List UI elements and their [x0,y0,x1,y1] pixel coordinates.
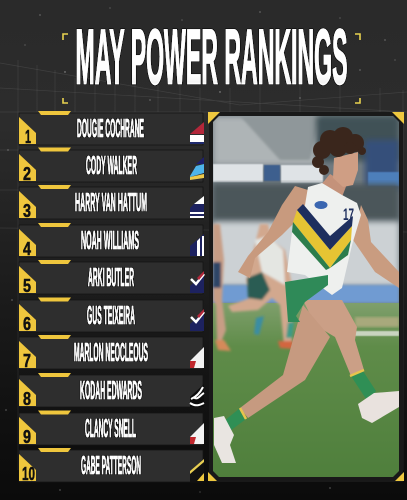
row 4 [19,223,204,259]
title corner brackets [63,34,360,103]
player: sponsor logo [314,201,328,209]
row 3 [19,185,204,221]
player: right boot [358,391,399,423]
photo corner accents [208,112,404,481]
row 9 [19,410,204,447]
row 8: KODAH EDWARDS [80,377,142,405]
player: shorts [285,275,328,322]
main player [214,127,399,463]
player: jersey chevron [292,204,353,270]
panel: rankings list [19,111,204,484]
row 10: GABE PATTERSON [81,452,141,480]
text: MARLON NEOCLEOUS [74,339,148,367]
row 9: 9 [23,427,31,447]
row 7: 7 [23,351,31,371]
player: face [333,152,358,187]
player: left sock [226,409,246,430]
row 2 [19,148,204,184]
player: left leg [240,305,330,418]
player: right arm [353,205,399,288]
row 5: ARKI BUTLER [88,264,134,292]
player: left boot [214,416,236,463]
text: DOUGIE COCHRANE [77,115,144,143]
row 9: CLANCY SNELL [85,415,136,443]
text: HARRY VAN HATTUM [75,189,147,217]
stadium background [213,116,399,308]
player: hair [312,127,366,175]
panel: player photo [209,112,403,482]
row 4: 4 [23,239,31,259]
row 10 [19,448,204,484]
row 6: GUS TEIXEIRA [87,302,135,330]
row 1 [19,111,204,147]
player: right sock [352,372,376,398]
row 10: 10 [22,464,35,484]
row 2: CODY WALKER [86,152,137,180]
player: neck [322,174,346,196]
row 5: 5 [23,276,31,296]
row 3: 3 [23,201,31,221]
row 1: 1 [25,127,31,147]
player: sock tops [240,370,364,419]
player: right leg [303,300,364,376]
row 8: 8 [23,389,31,409]
row 7 [19,335,204,371]
player: jersey [287,183,361,295]
row 8 [19,373,204,409]
row 6: 6 [23,314,31,334]
row 2: 2 [23,164,31,184]
player: left arm [238,186,308,278]
row 6 [19,298,204,334]
grass field [213,303,399,478]
background players [213,224,294,351]
row 5 [19,260,204,296]
player: number 17: 17 [343,205,354,224]
row 4: NOAH WILLIAMS [81,227,139,255]
